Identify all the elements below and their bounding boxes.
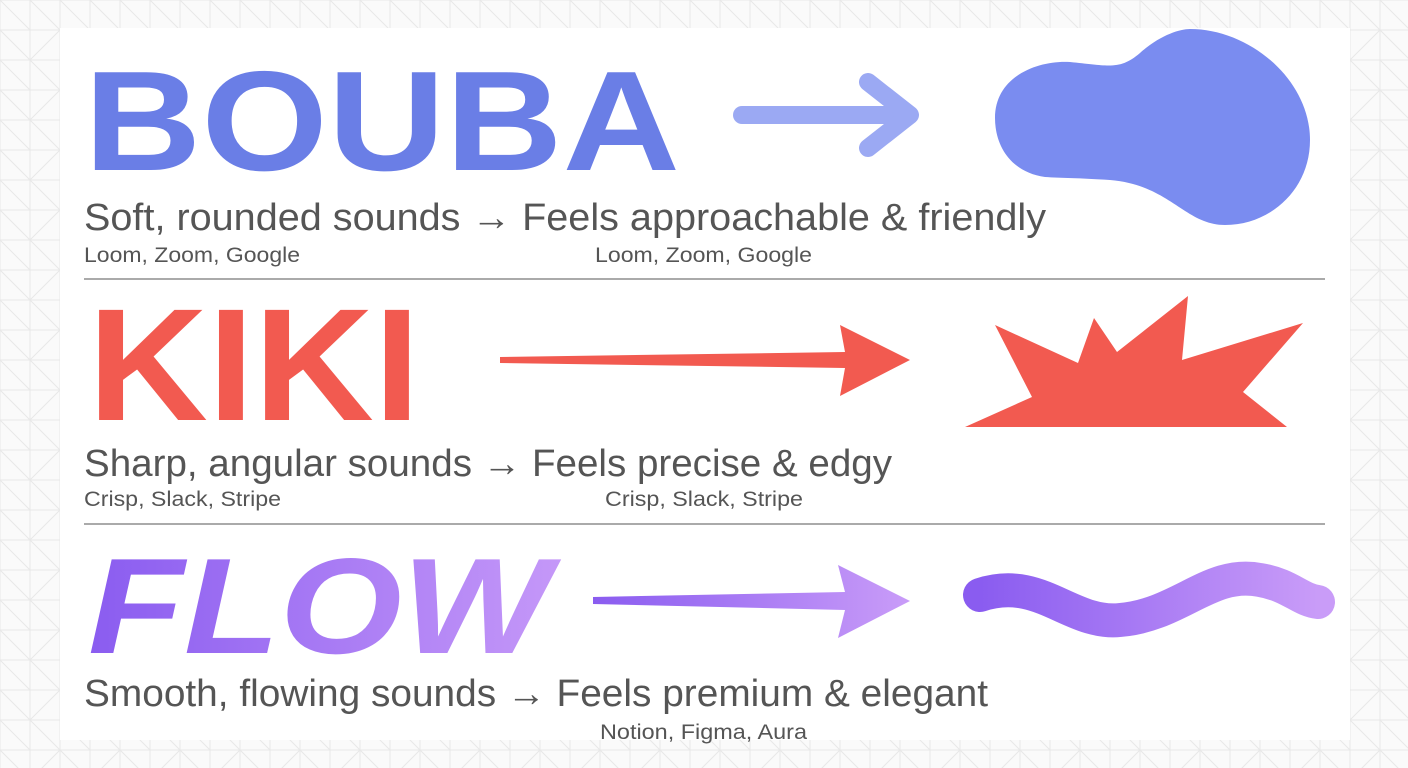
- arrow: sharp: [500, 325, 910, 396]
- text: kiki examples: [84, 488, 803, 511]
- text: bouba examples: Loom, Zoom, Google: [84, 244, 300, 267]
- text: flow description: Smooth, flowing sounds → Feels premium & elegant: [84, 673, 988, 715]
- heading: KIKI: KIKI: [88, 275, 420, 454]
- heading: BOUBA: BOUBA: [84, 42, 680, 201]
- text: bouba description: Soft, rounded sounds → Feels approachable & friendly: [84, 197, 1046, 239]
- text: bouba examples: [84, 244, 812, 267]
- text: kiki examples: Crisp, Slack, Stripe: [84, 488, 281, 511]
- arrow: flowing: [593, 565, 910, 638]
- shape: blob: [995, 29, 1310, 225]
- shape: starburst: [965, 296, 1303, 427]
- text: kiki description: Sharp, angular sounds → Feels precise & edgy: [84, 443, 892, 485]
- shape: wave: [980, 579, 1318, 620]
- heading: FLOW: FLOW: [88, 530, 562, 682]
- text: bouba examples: Loom, Zoom, Google: [595, 244, 812, 267]
- text: kiki examples: Crisp, Slack, Stripe: [605, 488, 803, 511]
- arrow: soft rounded: [742, 82, 910, 148]
- text: flow examples: Notion, Figma, Aura: [600, 721, 807, 744]
